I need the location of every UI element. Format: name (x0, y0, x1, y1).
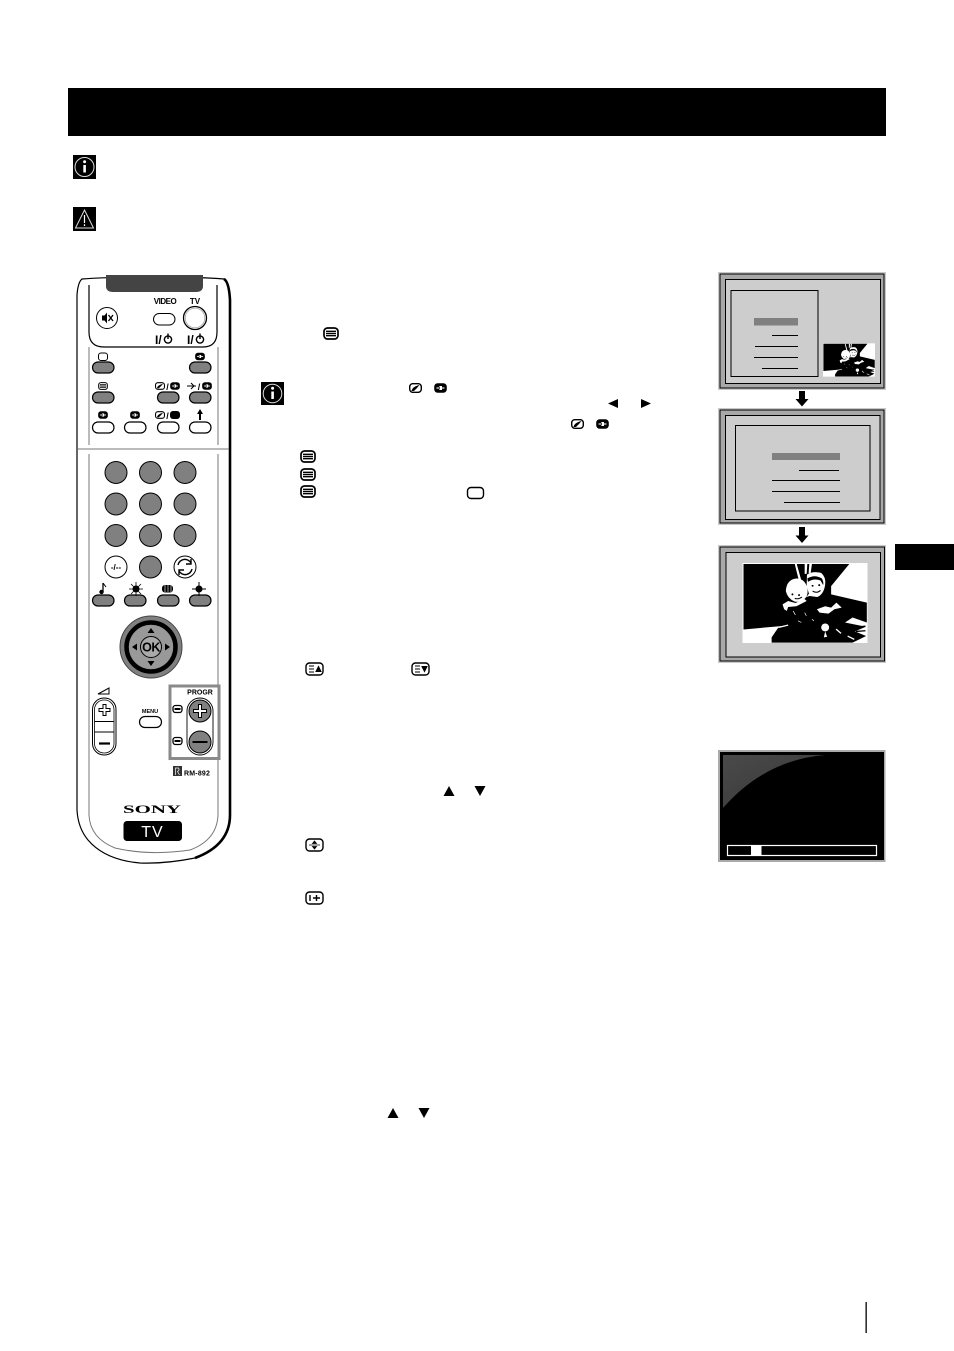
power section: VIDEO (154, 297, 176, 306)
level bar (728, 845, 876, 856)
panel: dark TV screen with level bar (718, 750, 886, 862)
function button icons: / (166, 382, 169, 392)
power section: I/ (155, 333, 162, 347)
power section (89, 285, 217, 347)
panel: TV screen with menu and small picture (718, 272, 886, 390)
screen sheen (723, 755, 825, 808)
number buttons (105, 462, 196, 578)
remote control: -/-- (111, 563, 121, 572)
power section: TV (190, 297, 201, 306)
TV badge (124, 821, 182, 841)
icon: recall (178, 559, 192, 575)
remote body (77, 277, 230, 863)
brand logo: SONY (123, 804, 182, 816)
panel: TV screen with full picture (718, 545, 886, 663)
icon: warning note (73, 207, 96, 231)
directional pad with OK button: OK (142, 640, 160, 654)
model label: RM-892 (184, 770, 210, 778)
function buttons (92, 362, 211, 433)
model label (173, 766, 210, 778)
instruction icons (301, 328, 651, 1118)
arrow: to picture screen (796, 527, 808, 543)
function button icons (98, 353, 212, 421)
sound and picture buttons (92, 582, 211, 606)
title bar (68, 88, 886, 136)
function button icons: / (166, 411, 169, 421)
menu button (140, 709, 162, 728)
page number rule (866, 1302, 867, 1333)
remote control (77, 275, 230, 863)
infrared window (106, 275, 203, 292)
icon: information note in steps (261, 382, 284, 405)
programme up and down buttons, highlighted (170, 686, 219, 758)
side section tab (895, 544, 954, 570)
function button icons: / (198, 382, 201, 392)
TV badge: TV (141, 824, 164, 841)
arrow: to next screen (796, 391, 808, 406)
volume control (92, 688, 116, 755)
icon: information note (73, 155, 96, 179)
power section: I/ (187, 333, 194, 347)
directional pad with OK button (120, 616, 182, 678)
menu button: MENU (142, 709, 158, 715)
panel: TV screen with full menu (718, 408, 886, 525)
programme up and down buttons, highlighted: PROGR (187, 690, 213, 696)
